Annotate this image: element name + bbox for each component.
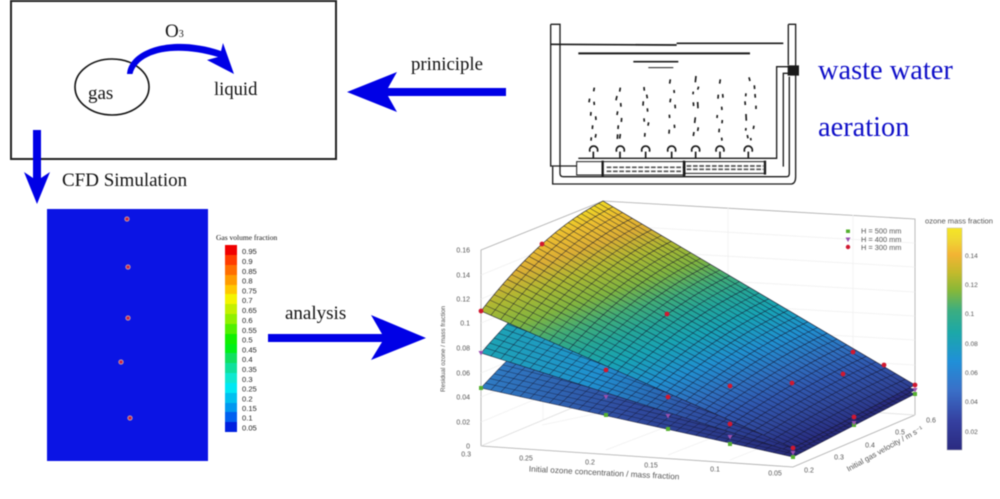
legend labels: 0.1 (242, 414, 253, 422)
legend: gas volume fraction (216, 233, 277, 432)
z axis tick labels: 0.16 (456, 248, 470, 254)
panel: CFD simulation field (47, 209, 208, 461)
label: liquid: liquid (214, 79, 258, 100)
z axis tick labels: 0.02 (456, 420, 470, 426)
colour bar title: ozone mass fraction (925, 216, 993, 226)
colour bar: ozone mass fraction (925, 216, 993, 450)
label: CFD Simulation: CFD Simulation (62, 170, 188, 191)
y axis tick labels: 0.6 (926, 418, 936, 424)
surface: H = 300 mm (481, 201, 915, 448)
legend labels: 0.5 (242, 336, 253, 344)
colour bar: ozone mass fraction: 0.1 (965, 311, 974, 318)
legend labels: 0.65 (242, 306, 257, 315)
legend labels: 0.9 (242, 257, 253, 266)
chart: 3D residual ozone surface (440, 201, 993, 494)
x axis tick labels: 0.15 (644, 462, 658, 470)
data points: H = 500 mm (479, 386, 917, 459)
y axis tick labels: 0.3 (834, 454, 844, 462)
legend labels: 0.2 (242, 394, 253, 404)
legend labels: 0.45 (242, 346, 257, 354)
y axis tick labels: 0.5 (895, 430, 905, 436)
legend labels: 0.85 (242, 267, 257, 276)
panel: gas-liquid principle (11, 1, 336, 159)
diagram: waste water aeration tank (550, 24, 798, 184)
arrow: principle, from tank to box (347, 72, 506, 112)
label: gas: gas (88, 83, 113, 104)
chart legend (846, 226, 901, 252)
z axis tick labels: 0.1 (460, 320, 470, 328)
z axis tick labels: 0 (466, 444, 470, 450)
z axis tick labels: 0.08 (456, 346, 470, 352)
surface: H = 400 mm (481, 231, 915, 471)
gas bubbles in simulation (119, 217, 132, 420)
legend labels: 0.8 (242, 276, 253, 286)
colour bar: ozone mass fraction: 0.06 (965, 370, 978, 377)
legend labels: 0.05 (242, 424, 257, 432)
legend labels: 0.6 (242, 316, 253, 325)
chart legend: H = 300 mm (861, 243, 901, 252)
y axis tick labels: 0.4 (865, 442, 875, 450)
x axis tick labels: 0.2 (585, 460, 595, 466)
legend labels: 0.15 (242, 404, 257, 413)
label: analysis: analysis (285, 303, 346, 324)
legend labels: 0.55 (242, 326, 257, 335)
z axis tick labels (456, 248, 471, 458)
colour bar: ozone mass fraction: 0.08 (965, 341, 978, 348)
data points: H = 300 mm (479, 242, 917, 450)
label: O3: O3 (165, 21, 184, 42)
arrow: ozone transfer from gas to liquid (127, 43, 234, 74)
legend labels: 0.25 (242, 384, 257, 394)
x axis title: Initial ozone concentration / mass fraction (529, 465, 680, 481)
legend labels: 0.4 (242, 355, 253, 364)
legend labels: 0.7 (242, 296, 253, 305)
legend labels: 0.75 (242, 286, 257, 296)
z axis title: Residual ozone / mass fraction (440, 305, 447, 392)
label: priniciple: priniciple (411, 54, 483, 75)
chart box axes (481, 201, 915, 467)
colour bar: ozone mass fraction: 0.12 (965, 282, 978, 289)
z axis tick labels: 0.06 (456, 370, 470, 378)
colour bar: ozone mass fraction: 0.14 (965, 253, 978, 260)
x axis tick labels: 0.25 (519, 456, 533, 462)
arrow: down to CFD simulation (24, 130, 50, 204)
legend labels (242, 247, 257, 432)
data points: H = 400 mm (478, 351, 918, 456)
legend colour bar (225, 245, 237, 432)
gas bubble (75, 59, 149, 115)
legend title: Gas volume fraction (216, 233, 277, 242)
colour bar: ozone mass fraction: 0.04 (965, 399, 978, 406)
legend labels: 0.35 (242, 365, 257, 374)
z axis tick labels: 0.3 (461, 452, 471, 458)
z axis tick labels: 0.04 (456, 394, 470, 402)
y axis tick labels: 0.2 (804, 468, 814, 474)
surface: H = 500 mm (481, 252, 915, 494)
chart legend: H = 400 mm (861, 235, 901, 244)
legend labels: 0.3 (242, 375, 253, 384)
legend labels: 0.95 (242, 247, 257, 256)
chart legend: H = 500 mm (861, 226, 901, 236)
x axis tick labels: 0.05 (768, 470, 782, 478)
z axis tick labels: 0.12 (456, 296, 470, 304)
title: aeration: aeration (818, 112, 909, 143)
y axis tick labels (804, 418, 936, 474)
x axis tick labels: 0.1 (710, 466, 720, 474)
y axis title: Initial gas velocity / m s⁻¹ (845, 424, 925, 474)
colour bar: ozone mass fraction: 0.02 (965, 429, 978, 436)
title: waste water: waste water (818, 55, 953, 86)
arrow: analysis (268, 315, 426, 360)
x axis tick labels (519, 456, 782, 478)
z axis tick labels: 0.14 (456, 272, 470, 280)
